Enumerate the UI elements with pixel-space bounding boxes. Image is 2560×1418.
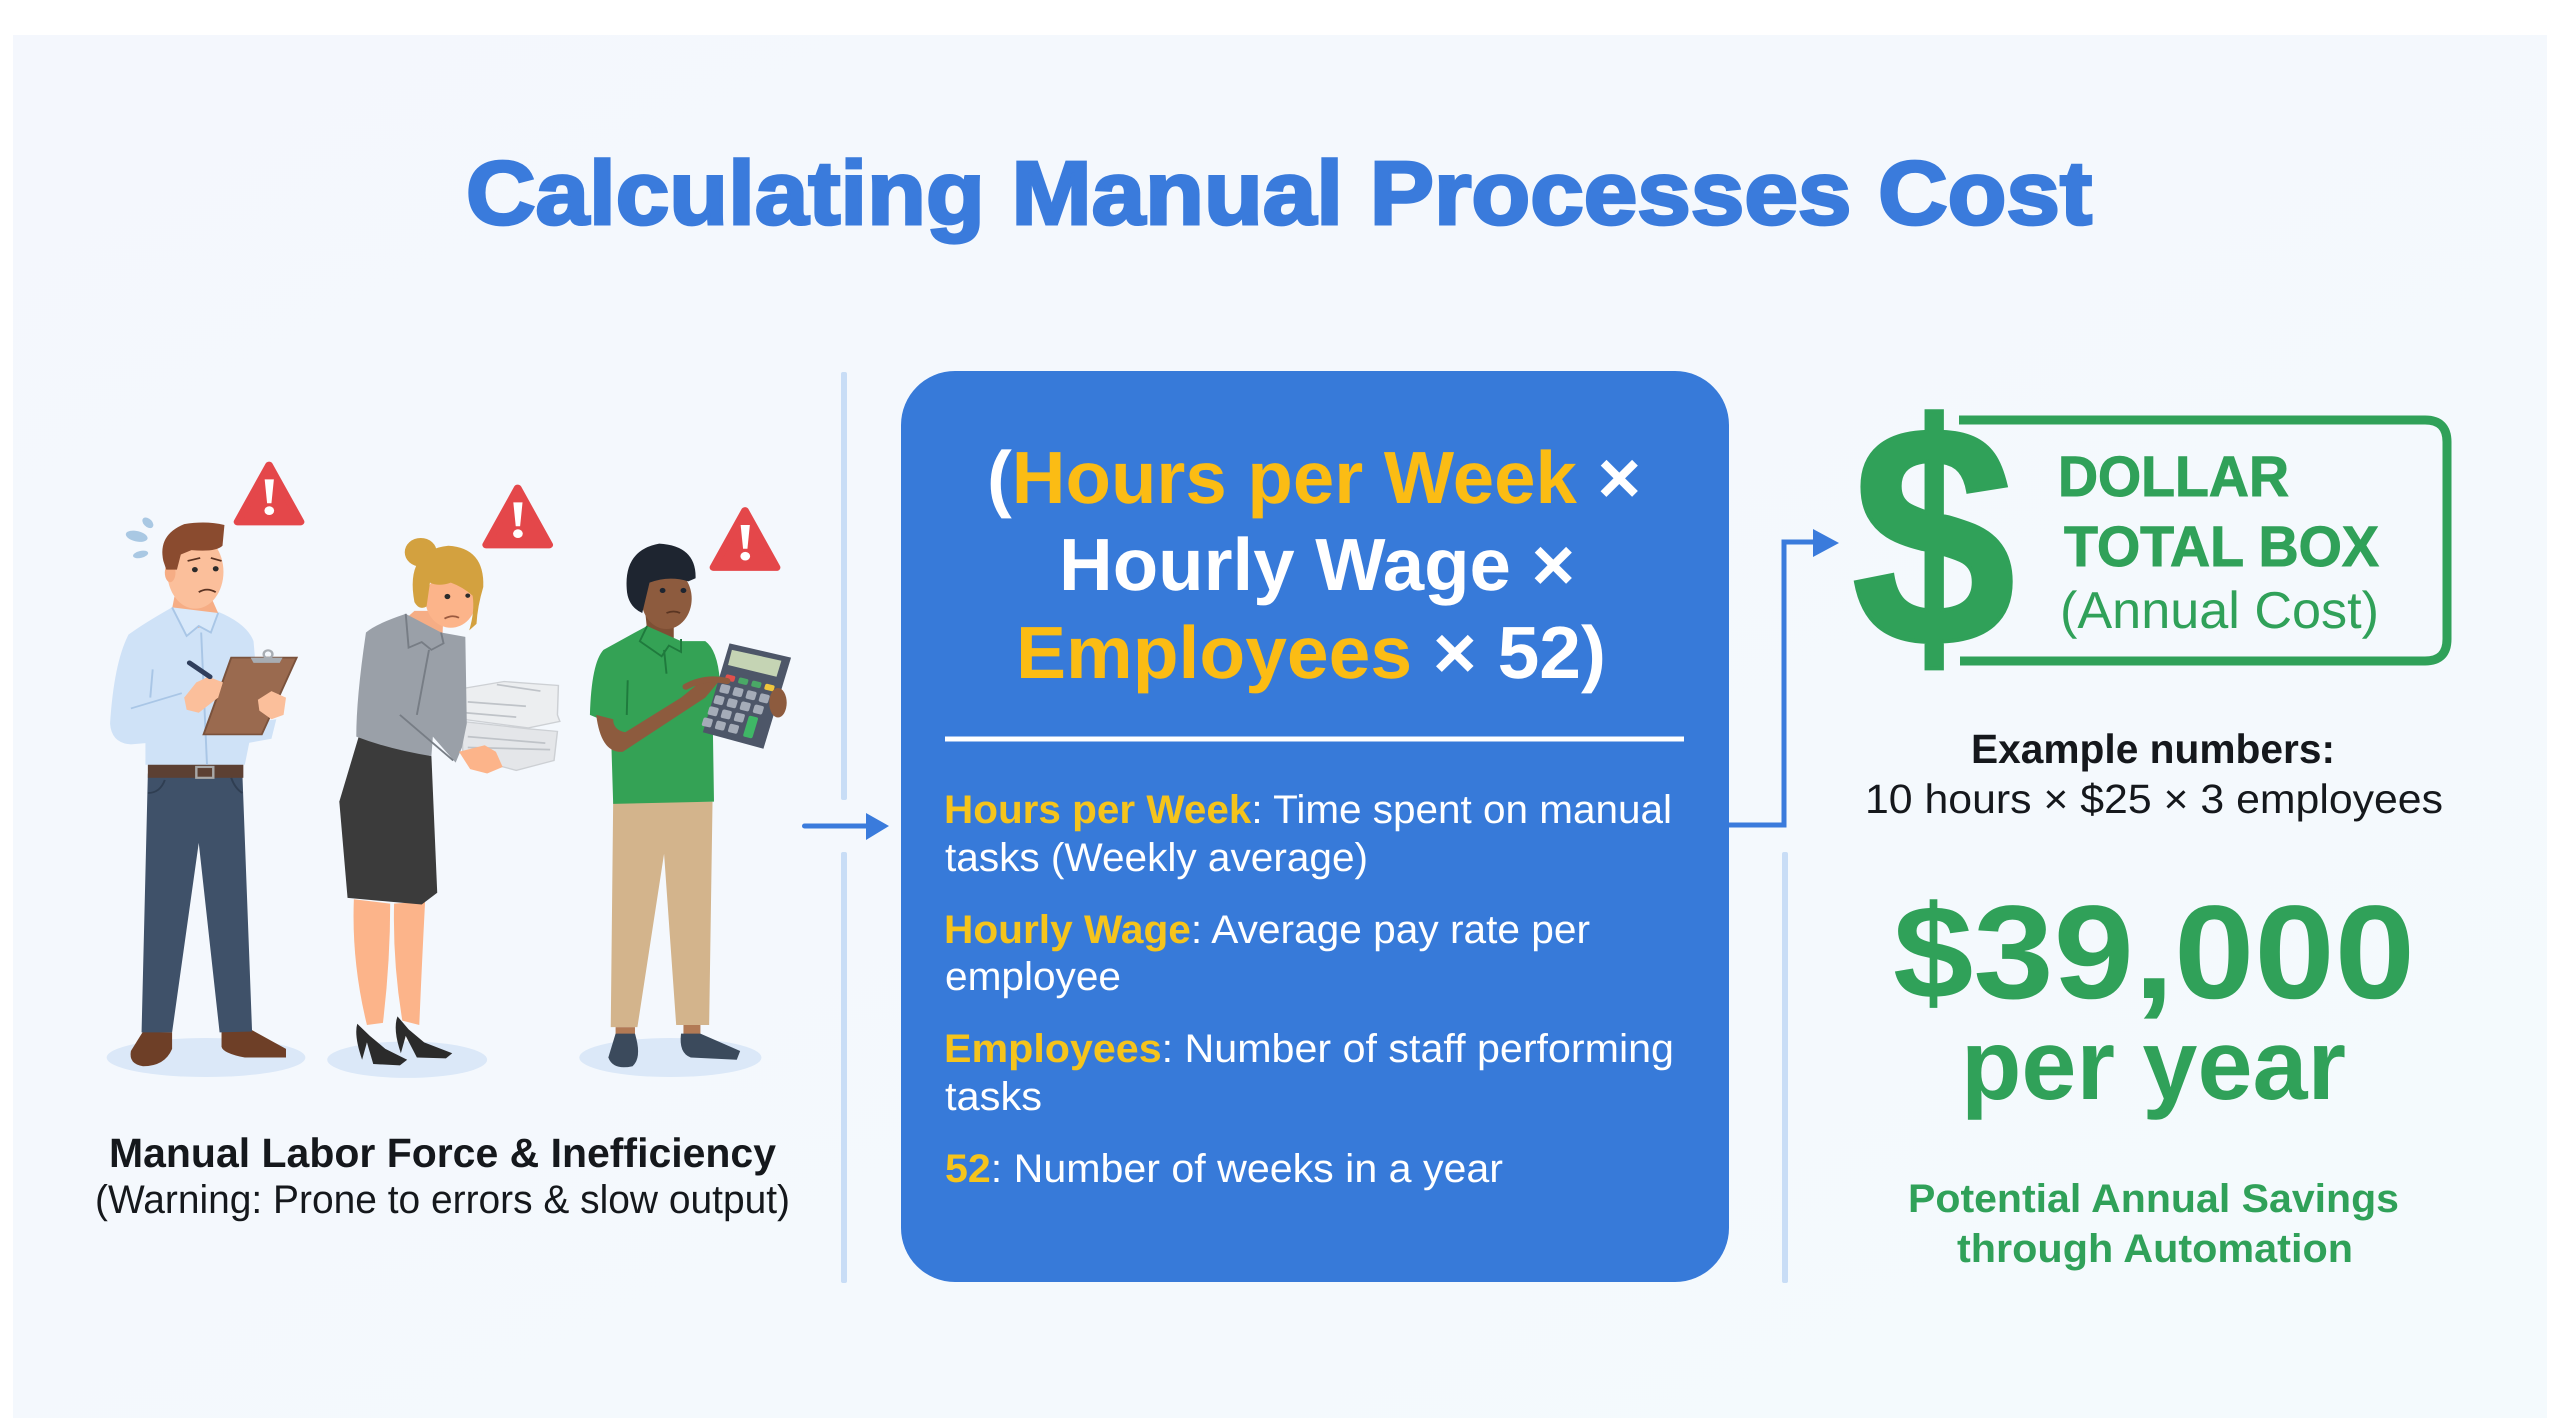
person: woman with paper stack: [327, 538, 560, 1078]
vertical separator left: [841, 372, 847, 1283]
illustration: three workers: [107, 465, 791, 1078]
result: annual cost: [1893, 879, 2415, 1121]
left caption: Manual Labor Force & Inefficiency: [109, 1130, 776, 1176]
arrow: workers to formula: [802, 813, 889, 840]
box text: TOTAL BOX: [2064, 515, 2379, 579]
left caption: (Warning: Prone to errors & slow output): [95, 1178, 790, 1222]
variable definitions: Employees: Number of staff performing: [944, 1027, 1674, 1071]
result: annual cost: $39,000: [1893, 879, 2415, 1027]
dollar total box: [1852, 360, 2447, 712]
formula heading: Hourly Wage ×: [1059, 523, 1575, 606]
variable definitions: tasks (Weekly average): [945, 836, 1368, 880]
variable definitions: 52: Number of weeks in a year: [945, 1147, 1503, 1191]
variable definitions: [944, 788, 1674, 1191]
icon: warning triangle 2: [486, 488, 549, 545]
formula heading: [987, 436, 1641, 694]
savings note: [1908, 1177, 2399, 1271]
example numbers: Example numbers:: [1971, 726, 2335, 772]
variable definitions: employee: [945, 955, 1121, 999]
formula heading: Employees × 52): [1016, 611, 1606, 694]
icon: dollar sign: $: [1852, 360, 2015, 712]
person: man with clipboard: [107, 516, 305, 1077]
formula heading: (Hours per Week ×: [987, 436, 1641, 519]
box text: (Annual Cost): [2060, 582, 2379, 640]
panel: formula: [901, 371, 1729, 1282]
icon: calculator: [686, 643, 791, 749]
vertical separator right: [1782, 852, 1788, 1283]
box text: DOLLAR: [2058, 445, 2289, 509]
example numbers: 10 hours × $25 × 3 employees: [1865, 776, 2443, 822]
icon: warning triangle 1: [238, 465, 301, 522]
variable definitions: tasks: [945, 1075, 1042, 1119]
left caption: [95, 1130, 790, 1222]
result: annual cost: per year: [1961, 1009, 2346, 1121]
icon: warning triangle 3: [714, 511, 777, 567]
arrow: formula to dollar box: [1729, 529, 1839, 825]
icon: sweat drops: [124, 516, 156, 560]
savings note: Potential Annual Savings: [1908, 1177, 2399, 1221]
variable definitions: Hourly Wage: Average pay rate per: [944, 908, 1590, 952]
variable definitions: Hours per Week: Time spent on manual: [944, 788, 1672, 832]
title: Calculating Manual Processes Cost: [466, 144, 2092, 244]
savings note: through Automation: [1957, 1227, 2353, 1271]
example numbers: [1865, 726, 2443, 822]
box text: [2058, 445, 2379, 640]
person: man with calculator: [579, 544, 791, 1077]
formula divider: [945, 736, 1684, 742]
